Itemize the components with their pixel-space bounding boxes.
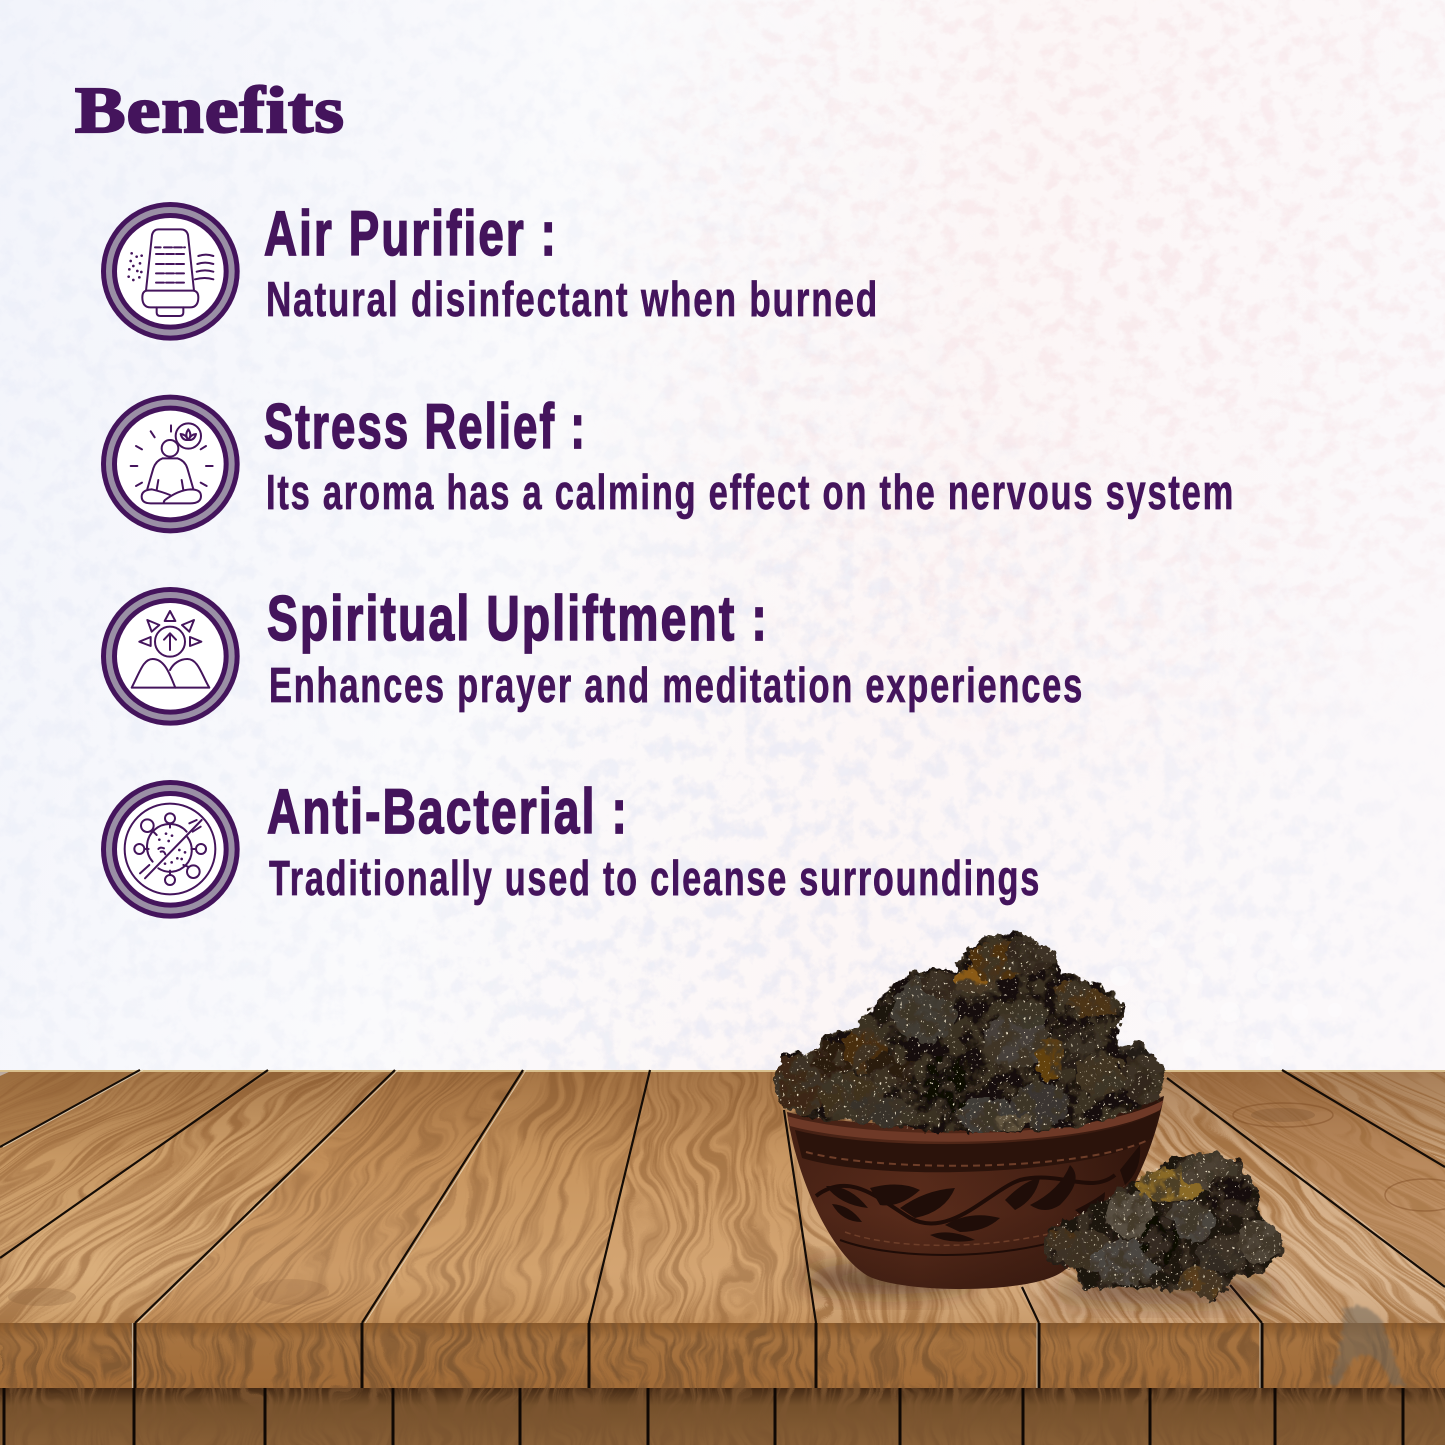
wood knots	[8, 1103, 1445, 1306]
heading: spiritual upliftment: Spiritual Upliftment :	[267, 584, 769, 654]
loose resin pile	[1044, 1150, 1285, 1304]
description: anti-bacterial: Traditionally used to cleanse surroundings	[269, 852, 1041, 906]
description: spiritual upliftment: Enhances prayer and meditation experiences	[269, 659, 1084, 713]
clay bowl	[780, 1090, 1170, 1295]
description: air purifier: Natural disinfectant when burned	[266, 273, 879, 327]
table top planks	[0, 1069, 1445, 1323]
heading: anti-bacterial: Anti-Bacterial :	[267, 777, 629, 847]
grey knot scar	[1326, 1306, 1405, 1386]
benefit row: stress relief	[101, 392, 1235, 533]
title: Benefits	[75, 74, 345, 147]
icon: spiritual sun over hills	[101, 587, 240, 726]
heading: air purifier: Air Purifier :	[264, 199, 558, 269]
benefit row: spiritual upliftment	[101, 584, 1084, 726]
heading: stress relief: Stress Relief :	[264, 392, 587, 462]
table underside	[0, 1388, 1445, 1445]
icon: air purifier	[101, 202, 240, 341]
table front edge	[0, 1304, 1445, 1388]
wooden table	[0, 1030, 1445, 1445]
marble background	[0, 0, 1445, 1070]
benefit row: air purifier	[101, 199, 879, 341]
icon: meditating person	[101, 395, 240, 533]
benefit row: anti-bacterial	[101, 777, 1041, 919]
resin heap in bowl	[765, 925, 1175, 1140]
bowl of myrrh resin	[765, 925, 1290, 1310]
plank grooves	[0, 1070, 1445, 1323]
icon: crossed-out virus	[101, 780, 240, 919]
